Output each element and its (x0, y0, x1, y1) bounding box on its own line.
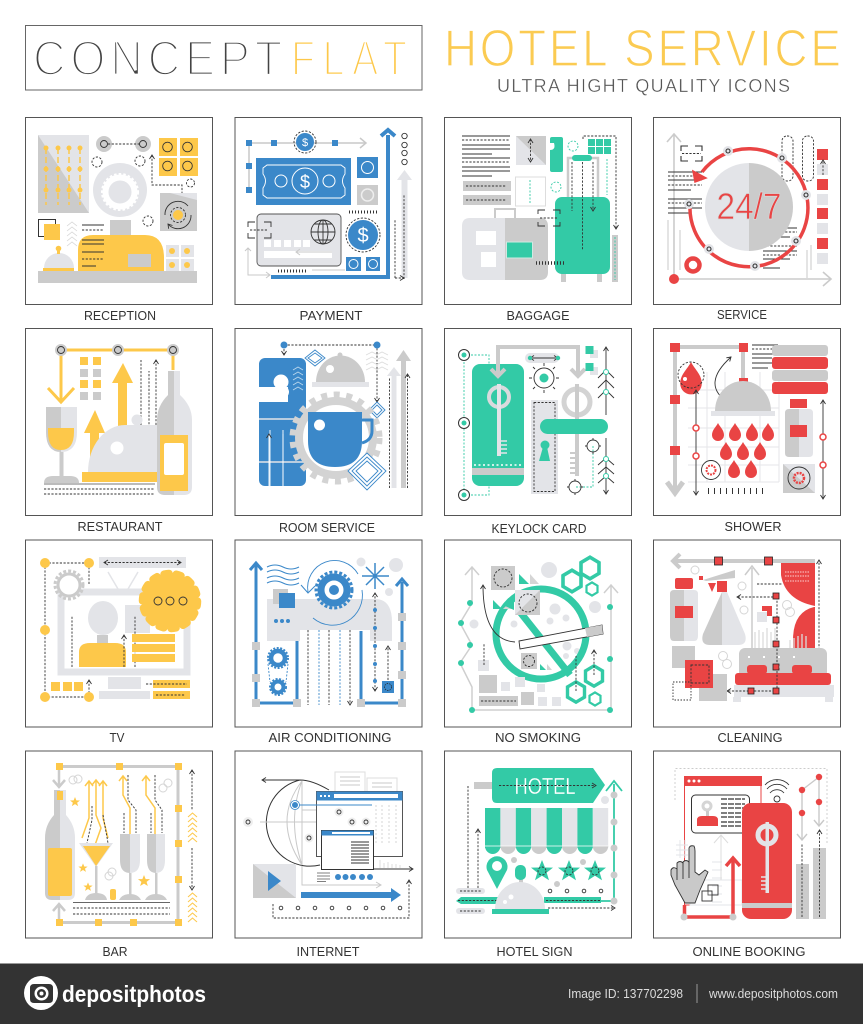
panel frame (654, 328, 840, 516)
icon: money and card: $ (302, 137, 308, 149)
icon: cleaning supplies and bed (670, 554, 834, 702)
icon: 24/7 clock: 24/7 (716, 186, 782, 227)
panel: room service (235, 328, 422, 535)
panel: restaurant (26, 328, 212, 534)
footer bar (0, 964, 863, 1024)
header box: concept flat: CONCEPT (33, 30, 282, 85)
panel frame (235, 118, 422, 304)
panel: internet (235, 751, 422, 959)
icon: air conditioner (250, 558, 408, 707)
label: SHOWER (724, 519, 782, 534)
header box: concept flat: FLAT (291, 32, 407, 86)
panel frame (654, 751, 840, 938)
label: HOTEL SIGN (496, 944, 572, 959)
panel: no smoking (444, 540, 632, 745)
label: INTERNET (296, 944, 360, 959)
panel frame (654, 540, 840, 727)
panel: air conditioning (235, 540, 422, 745)
panel: online booking (654, 751, 840, 959)
panel frame (26, 751, 212, 938)
label: SERVICE (717, 307, 767, 322)
icon: hotel storefront (456, 768, 622, 914)
label: NO SMOKING (495, 730, 581, 745)
panel frame (26, 540, 212, 727)
icon: money and card: $ (300, 172, 310, 192)
icon: mobile booking (671, 768, 827, 920)
panel frame (444, 751, 632, 938)
brand name: depositphotos (62, 981, 206, 1007)
logo: depositphotos camera (24, 976, 58, 1010)
label: ROOM SERVICE (279, 520, 375, 535)
icon: luggage (462, 136, 618, 282)
label: CLEANING (718, 730, 782, 745)
panel: keylock card (444, 328, 632, 536)
label: PAYMENT (300, 308, 363, 323)
label: KEYLOCK CARD (492, 521, 586, 536)
panel: hotel sign (444, 751, 632, 959)
image id: Image ID: 137702298 (568, 987, 683, 1001)
panel frame (235, 328, 422, 516)
title: hotel service: HOTEL SERVICE (444, 20, 841, 78)
icon: wine and cloche (44, 344, 192, 495)
icon: no smoking (458, 557, 618, 713)
panel frame (26, 328, 212, 516)
panel frame (444, 540, 632, 727)
panel: cleaning (654, 540, 840, 745)
panel frame (235, 540, 422, 727)
icon: money and card (245, 130, 412, 279)
icon: money and card: $ (357, 225, 369, 247)
website: www.depositphotos.com (708, 987, 838, 1001)
panel frame (26, 118, 212, 304)
panel: reception (26, 118, 212, 323)
label: BAGGAGE (506, 308, 570, 323)
label: RESTAURANT (78, 519, 163, 534)
icon: reception desk (38, 135, 198, 283)
label: BAR (102, 944, 128, 959)
icon: television (40, 557, 198, 702)
panel: baggage (444, 118, 632, 323)
panel: shower (654, 328, 840, 534)
panel: bar (26, 751, 212, 959)
panel frame (654, 118, 840, 304)
icon: shower (667, 343, 828, 499)
panel frame (235, 751, 422, 938)
icon: globe and browser windows (243, 772, 413, 918)
label: AIR CONDITIONING (268, 730, 392, 745)
icon: bar drinks (45, 763, 197, 926)
panel: payment (235, 118, 422, 323)
panel: service (654, 118, 840, 322)
panel frame (444, 118, 632, 304)
panel: tv (26, 540, 212, 745)
icon: hotel storefront: HOTEL (514, 773, 576, 799)
label: TV (110, 730, 125, 745)
icon: coffee and door hanger (258, 342, 411, 490)
header box: concept flat (26, 26, 422, 90)
label: RECEPTION (84, 308, 156, 323)
icon: key card and lock (458, 346, 614, 500)
panel frame (444, 328, 632, 516)
label: ONLINE BOOKING (692, 944, 806, 959)
subtitle: ULTRA HIGHT QUALITY ICONS (497, 76, 790, 96)
icon: 24/7 clock (667, 134, 831, 286)
